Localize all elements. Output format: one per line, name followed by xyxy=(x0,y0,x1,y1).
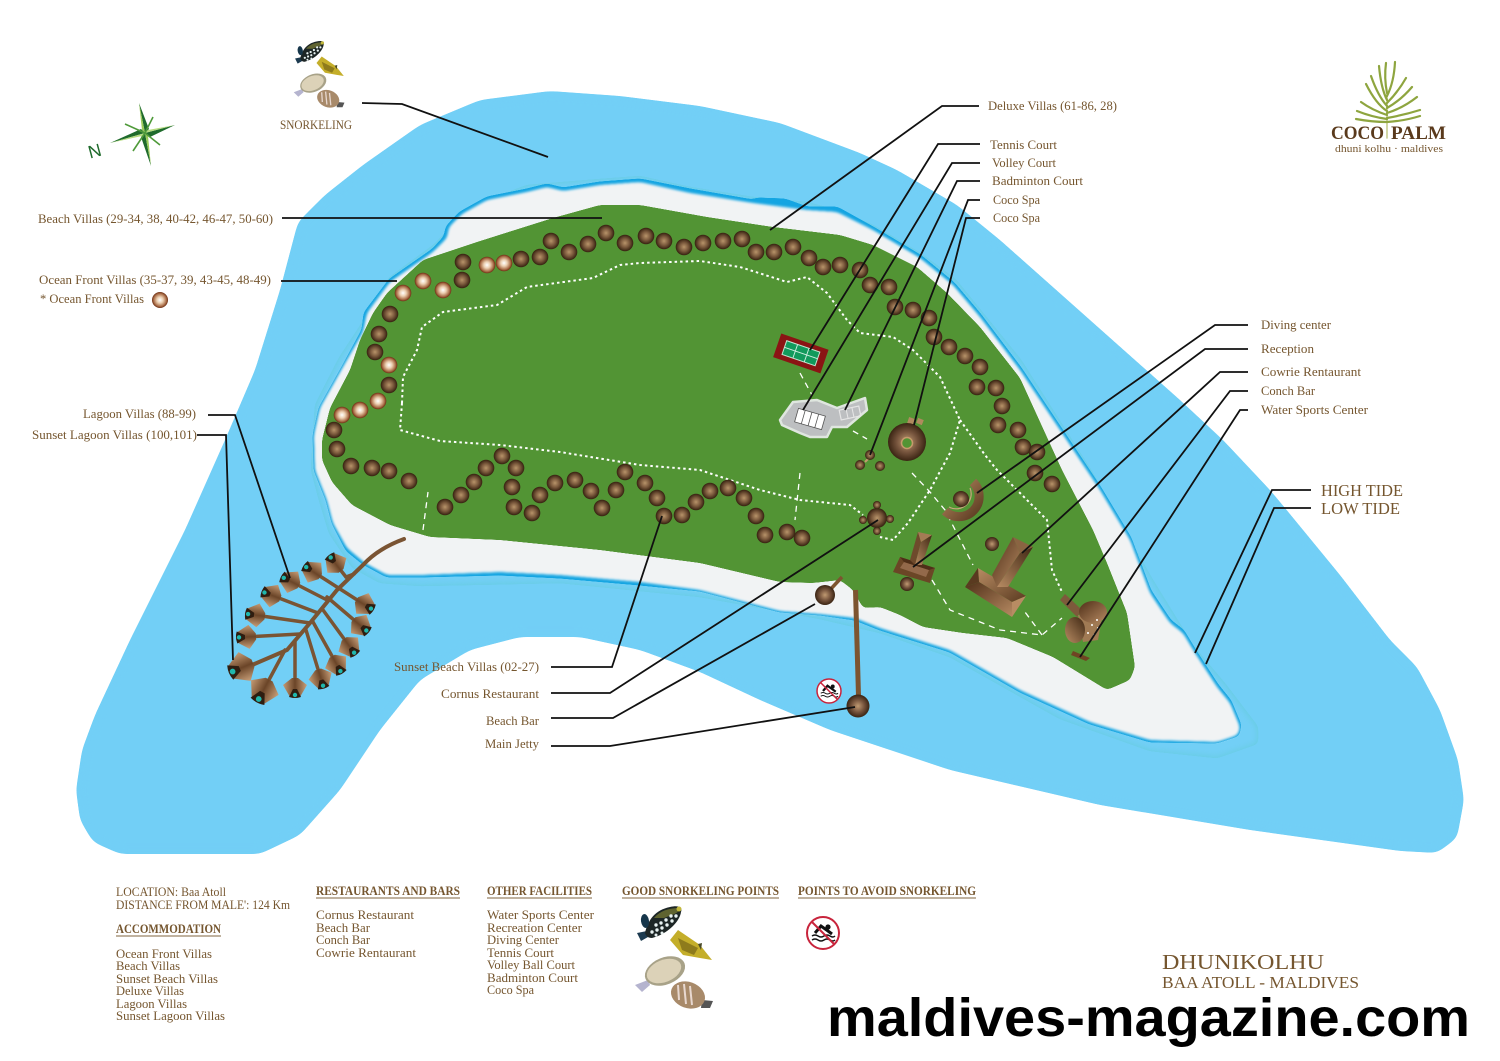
icon: compass rose xyxy=(110,103,175,166)
logo: coco palm: dhuni kolhu · maldives xyxy=(1335,143,1443,155)
label: reception: Reception xyxy=(1261,341,1314,356)
low tide line xyxy=(314,180,1240,742)
diving center xyxy=(945,482,979,517)
sunset beach villas xyxy=(437,448,810,546)
icon: no swimming xyxy=(807,917,839,949)
logo: coco palm: COCO xyxy=(1331,123,1384,144)
list: facilities: Recreation Center xyxy=(487,920,583,935)
text block: location: DISTANCE FROM MALE': 124 Km xyxy=(116,897,290,912)
list: facilities: Coco Spa xyxy=(487,982,534,997)
leader: badminton court xyxy=(845,181,980,410)
leader: diving center xyxy=(977,325,1248,493)
island vegetation xyxy=(322,205,1135,690)
label: sunset lagoon villas: Sunset Lagoon Villas (100,101) xyxy=(32,427,197,442)
leader: low tide xyxy=(1206,508,1311,664)
list: accommodation: Lagoon Villas xyxy=(116,996,187,1011)
label: sunset beach villas: Sunset Beach Villas (02-27) xyxy=(394,659,539,674)
leader: main jetty xyxy=(551,707,855,746)
label: badminton court: Badminton Court xyxy=(992,173,1083,188)
label: volley court: Volley Court xyxy=(992,155,1056,170)
label: water sports center: Water Sports Center xyxy=(1261,402,1369,417)
list: facilities: Badminton Court xyxy=(487,970,578,985)
heading: restaurants and bars: RESTAURANTS AND BARS xyxy=(316,883,460,898)
leader: tennis court xyxy=(810,144,980,350)
leader: lagoon villas xyxy=(208,415,290,578)
leader: high tide xyxy=(1195,490,1311,653)
label: deluxe villas: Deluxe Villas (61-86, 28) xyxy=(988,98,1117,113)
list: restaurants xyxy=(316,907,416,960)
label: north: N xyxy=(86,140,104,162)
sand beach xyxy=(314,182,1240,742)
title: dhunikolhu: DHUNIKOLHU xyxy=(1162,950,1324,974)
list: facilities xyxy=(487,907,595,997)
text block: location xyxy=(116,884,290,912)
leader: coco spa small xyxy=(870,200,980,455)
leader: volley court xyxy=(803,163,980,410)
leader: coco spa large xyxy=(914,218,980,425)
title: dhunikolhu xyxy=(1162,950,1359,992)
text block: location: LOCATION: Baa Atoll xyxy=(116,884,226,899)
label: main jetty: Main Jetty xyxy=(485,736,539,751)
logo: coco palm xyxy=(1331,62,1446,155)
leader: conch bar xyxy=(1067,391,1248,605)
label: ocean front villas: Ocean Front Villas (35-37, 39, 43-45, 48-49) xyxy=(39,272,271,287)
dashed service paths xyxy=(423,373,1062,635)
list: accommodation: Beach Villas xyxy=(116,958,180,973)
list: accommodation: Ocean Front Villas xyxy=(116,946,212,961)
icon: good snorkeling fish xyxy=(635,906,713,1013)
icon: ocean front villa marker xyxy=(152,292,168,308)
list: facilities: Water Sports Center xyxy=(487,907,595,922)
label: cornus restaurant: Cornus Restaurant xyxy=(441,686,539,701)
label: conch bar: Conch Bar xyxy=(1261,383,1316,398)
high tide line xyxy=(312,177,1257,757)
leader: ocean front villas xyxy=(281,280,397,282)
dotted walking paths xyxy=(400,261,1062,592)
label: high tide: HIGH TIDE xyxy=(1321,481,1403,500)
list: restaurants: Beach Bar xyxy=(316,920,371,935)
no swimming icon on map xyxy=(817,679,841,703)
cowrie restaurant xyxy=(965,537,1033,617)
label: beach villas: Beach Villas (29-34, 38, 40-42, 46-47, 50-60) xyxy=(38,211,273,226)
label: beach bar: Beach Bar xyxy=(486,713,540,728)
label: coco spa: Coco Spa xyxy=(993,192,1040,207)
list: restaurants: Cowrie Rentaurant xyxy=(316,945,416,960)
list: restaurants: Cornus Restaurant xyxy=(316,907,414,922)
watermark: maldives-magazine.com xyxy=(827,988,1470,1048)
leader: cowrie restaurant xyxy=(1022,372,1248,553)
title: dhunikolhu: BAA ATOLL - MALDIVES xyxy=(1162,973,1359,992)
label: cowrie restaurant: Cowrie Rentaurant xyxy=(1261,364,1361,379)
list: accommodation: Sunset Lagoon Villas xyxy=(116,1008,225,1023)
tennis court xyxy=(773,334,829,373)
label: coco spa: Coco Spa xyxy=(993,210,1040,225)
leader: sunset lagoon villas xyxy=(197,435,233,660)
leader: deluxe villas xyxy=(770,106,979,230)
heading: accommodation: ACCOMMODATION xyxy=(116,921,222,936)
label: ocean front villas legend: * Ocean Front Villas xyxy=(40,291,144,306)
sea / lagoon xyxy=(76,91,1464,854)
list: restaurants: Conch Bar xyxy=(316,932,371,947)
label: low tide: LOW TIDE xyxy=(1321,499,1400,518)
icon: snorkeling fish xyxy=(294,41,344,111)
beach and ocean front villas xyxy=(326,225,1060,492)
list: accommodation xyxy=(116,946,225,1023)
list: accommodation: Deluxe Villas xyxy=(116,983,184,998)
leader: sunset beach villas xyxy=(551,516,662,667)
conch bar and water sports center xyxy=(1060,594,1107,661)
coco spa xyxy=(855,418,926,471)
list: accommodation: Sunset Beach Villas xyxy=(116,971,218,986)
cornus restaurant xyxy=(859,501,894,535)
label: tennis court: Tennis Court xyxy=(990,137,1057,152)
label: lagoon villas: Lagoon Villas (88-99) xyxy=(83,406,196,421)
leader: cornus restaurant xyxy=(551,520,878,693)
leader: snorkeling xyxy=(362,103,548,157)
lagoon villas xyxy=(223,539,404,710)
label: snorkeling: SNORKELING xyxy=(280,117,352,132)
leader: reception xyxy=(913,349,1248,567)
list: facilities: Volley Ball Court xyxy=(487,957,575,972)
label: diving center: Diving center xyxy=(1261,317,1332,332)
list: facilities: Diving Center xyxy=(487,932,560,947)
leader: water sports center xyxy=(1080,410,1248,657)
main jetty xyxy=(846,590,870,718)
heading: other facilities: OTHER FACILITIES xyxy=(487,883,592,898)
list: facilities: Tennis Court xyxy=(487,945,554,960)
beach bar xyxy=(815,577,842,605)
heading: good snorkeling points: GOOD SNORKELING POINTS xyxy=(622,883,779,898)
heading: points to avoid snorkeling: POINTS TO AVOID SNORKELING xyxy=(798,883,976,898)
leader: beach villas xyxy=(282,217,602,219)
leader: beach bar xyxy=(551,604,815,718)
logo: coco palm: PALM xyxy=(1391,123,1446,144)
volley ball and badminton courts xyxy=(780,398,867,437)
reception xyxy=(893,532,999,591)
